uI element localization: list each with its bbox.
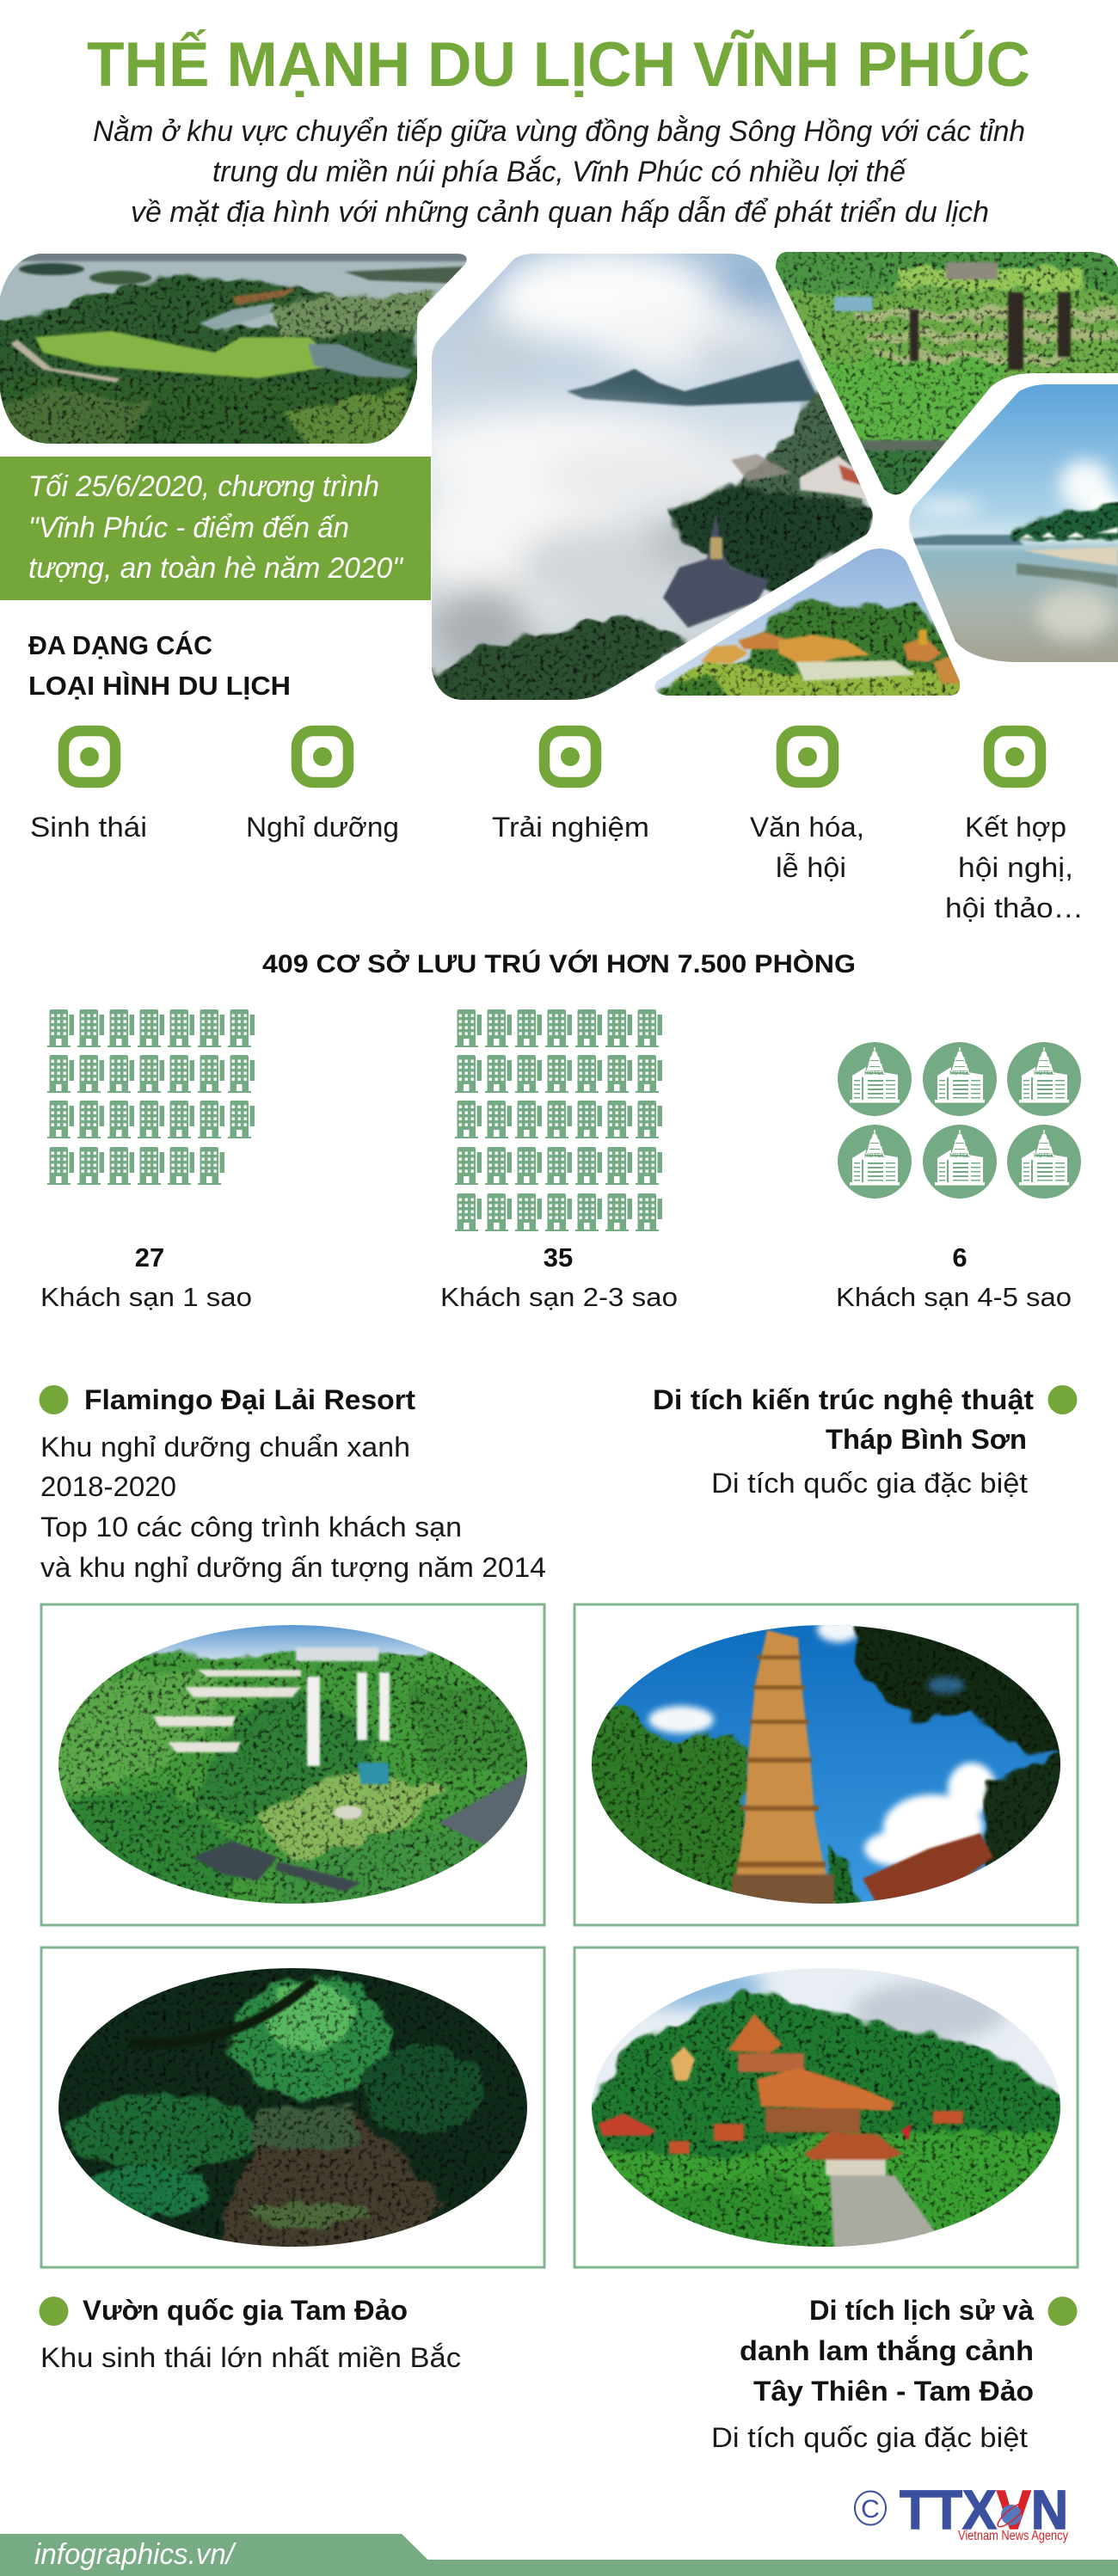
stat: 27 one-star [40, 1242, 252, 1312]
text block: Tay Thien heritage: danh lam thắng cảnh [740, 2335, 1034, 2366]
intro text: về mặt địa hình với những cảnh quan hấp dẫn để phát triển du lịch [131, 196, 989, 229]
text block: Flamingo Dai Lai Resort: Khu nghỉ dưỡng chuẩn xanh [40, 1432, 410, 1463]
type: Văn hóa, lễ hội: Văn hóa, [750, 812, 864, 843]
type: Trải nghiệm: Trải nghiệm [492, 812, 649, 843]
heading: tourism types [28, 630, 291, 701]
text block: Tam Dao national park: Vườn quốc gia Tam Đảo [83, 2295, 408, 2326]
type: Trải nghiệm [492, 731, 649, 843]
text block: Tay Thien heritage: Di tích quốc gia đặc biệt [711, 2422, 1028, 2453]
stat: 6 four-five-star: 6 [952, 1242, 968, 1273]
type: Kết hợp hội nghị, hội thảo: hội nghị, [958, 852, 1073, 883]
pictogram: 35 two-three-star hotels [455, 1009, 662, 1231]
text block: Binh Son tower: Di tích kiến trúc nghệ thuật [653, 1384, 1034, 1415]
photo: Tam Dao fog and mountain [432, 254, 873, 700]
icon: ring marker [544, 731, 596, 782]
photo: Tam Dao forest oval [58, 1968, 527, 2247]
type: Kết hợp hội nghị, hội thảo: hội thảo… [945, 892, 1084, 923]
pictogram: 27 one-star hotels [47, 1009, 255, 1185]
pictogram: 6 four-five-star hotels: HOTEL [864, 1153, 886, 1159]
text block: Tay Thien heritage: Tây Thiên - Tam Đảo [753, 2376, 1034, 2407]
panel: photo frame Flamingo [34, 1604, 550, 1925]
panel: photo frame Tay Thien temple [574, 1947, 1078, 2267]
heading: tourism types: ĐA DẠNG CÁC [28, 630, 212, 660]
stat: 35 two-three-star: 35 [544, 1242, 573, 1273]
photo: Flamingo hotel top right [776, 252, 1118, 495]
photo: lake and beach [903, 383, 1118, 666]
type: Kết hợp hội nghị, hội thảo [945, 731, 1084, 923]
intro text: Nằm ở khu vực chuyển tiếp giữa vùng đồng bằng Sông Hồng với các tỉnh [93, 115, 1025, 148]
text block: Tay Thien heritage: Di tích lịch sử và [809, 2295, 1034, 2326]
intro text [93, 115, 1025, 229]
type: Nghỉ dưỡng: Nghỉ dưỡng [246, 812, 399, 843]
pictogram: 6 four-five-star hotels: HOTEL [1034, 1070, 1055, 1076]
logo: TTXVN: C [861, 2495, 880, 2524]
icon: ring marker [989, 731, 1041, 782]
text block: Tam Dao national park [40, 2295, 461, 2373]
photo: Tay Thien temple oval [592, 1968, 1060, 2247]
type: Văn hóa, lễ hội [750, 731, 864, 883]
type: Văn hóa, lễ hội: lễ hội [776, 852, 846, 883]
footer band [0, 2534, 1118, 2576]
text block: Binh Son tower: Tháp Bình Sơn [826, 1424, 1027, 1455]
stat: 35 two-three-star: Khách sạn 2-3 sao [440, 1282, 678, 1312]
panel: event note: "Vĩnh Phúc - điểm đến ấn [28, 512, 349, 544]
photo: aerial golf resort and lake [0, 254, 467, 444]
type: Nghỉ dưỡng [246, 731, 399, 843]
pictogram: 6 four-five-star hotels: HOTEL [949, 1070, 971, 1076]
icon: ring marker [64, 731, 115, 782]
title: THẾ MẠNH DU LỊCH VĨNH PHÚC [87, 30, 1030, 100]
text block: Flamingo Dai Lai Resort: và khu nghỉ dưỡng ấn tượng năm 2014 [40, 1552, 546, 1583]
intro text: trung du miền núi phía Bắc, Vĩnh Phúc có nhiều lợi thế [212, 156, 907, 188]
pictogram: 6 four-five-star hotels: HOTEL [1034, 1153, 1055, 1159]
panel: photo frame Tam Dao forest [34, 1947, 550, 2267]
photo: temple on hillside [654, 549, 960, 696]
panel: photo frame Binh Son tower [574, 1604, 1078, 1925]
text block: Binh Son tower: Di tích quốc gia đặc biệt [711, 1468, 1028, 1499]
icon: ring marker [297, 731, 348, 782]
text block: Flamingo Dai Lai Resort: Top 10 các công trình khách sạn [40, 1512, 462, 1543]
stat: 27 one-star: 27 [135, 1242, 164, 1273]
text block: Tay Thien heritage [711, 2295, 1077, 2453]
footer band: infographics.vn/ [34, 2538, 236, 2571]
text block: Flamingo Dai Lai Resort: Flamingo Đại Lải Resort [84, 1384, 415, 1415]
text block: Tam Dao national park: Khu sinh thái lớn nhất miền Bắc [40, 2342, 461, 2373]
type: Sinh thái: Sinh thái [30, 812, 147, 843]
type: Kết hợp hội nghị, hội thảo: Kết hợp [965, 812, 1066, 843]
panel: event note: tượng, an toàn hè năm 2020" [28, 552, 404, 585]
stat: 27 one-star: Khách sạn 1 sao [40, 1282, 252, 1312]
stat: 35 two-three-star [440, 1242, 678, 1312]
stat: 6 four-five-star [836, 1242, 1072, 1312]
heading: accommodation total: 409 CƠ SỞ LƯU TRÚ VỚI HƠN 7.500 PHÒNG [262, 949, 856, 978]
photo: Binh Son tower oval [592, 1625, 1060, 1904]
icon: ring marker [782, 731, 833, 782]
type: Sinh thái [30, 731, 147, 843]
pictogram: 6 four-five-star hotels: HOTEL [949, 1153, 971, 1159]
heading: tourism types: LOẠI HÌNH DU LỊCH [28, 671, 291, 701]
logo: TTXVN: Vietnam News Agency [958, 2529, 1068, 2543]
text block: Binh Son tower [653, 1384, 1077, 1499]
pictogram: 6 four-five-star hotels: HOTEL [864, 1070, 886, 1076]
pictogram: 6 four-five-star hotels [838, 1042, 1081, 1199]
panel: event note [0, 457, 431, 600]
panel: event note: Tối 25/6/2020, chương trình [28, 470, 379, 503]
text block: Flamingo Dai Lai Resort: 2018-2020 [40, 1471, 176, 1502]
logo: TTXVN: TTXVN [900, 2479, 1068, 2541]
stat: 6 four-five-star: Khách sạn 4-5 sao [836, 1282, 1072, 1312]
text block: Flamingo Dai Lai Resort [40, 1384, 546, 1583]
photo: Flamingo resort oval [58, 1625, 527, 1904]
